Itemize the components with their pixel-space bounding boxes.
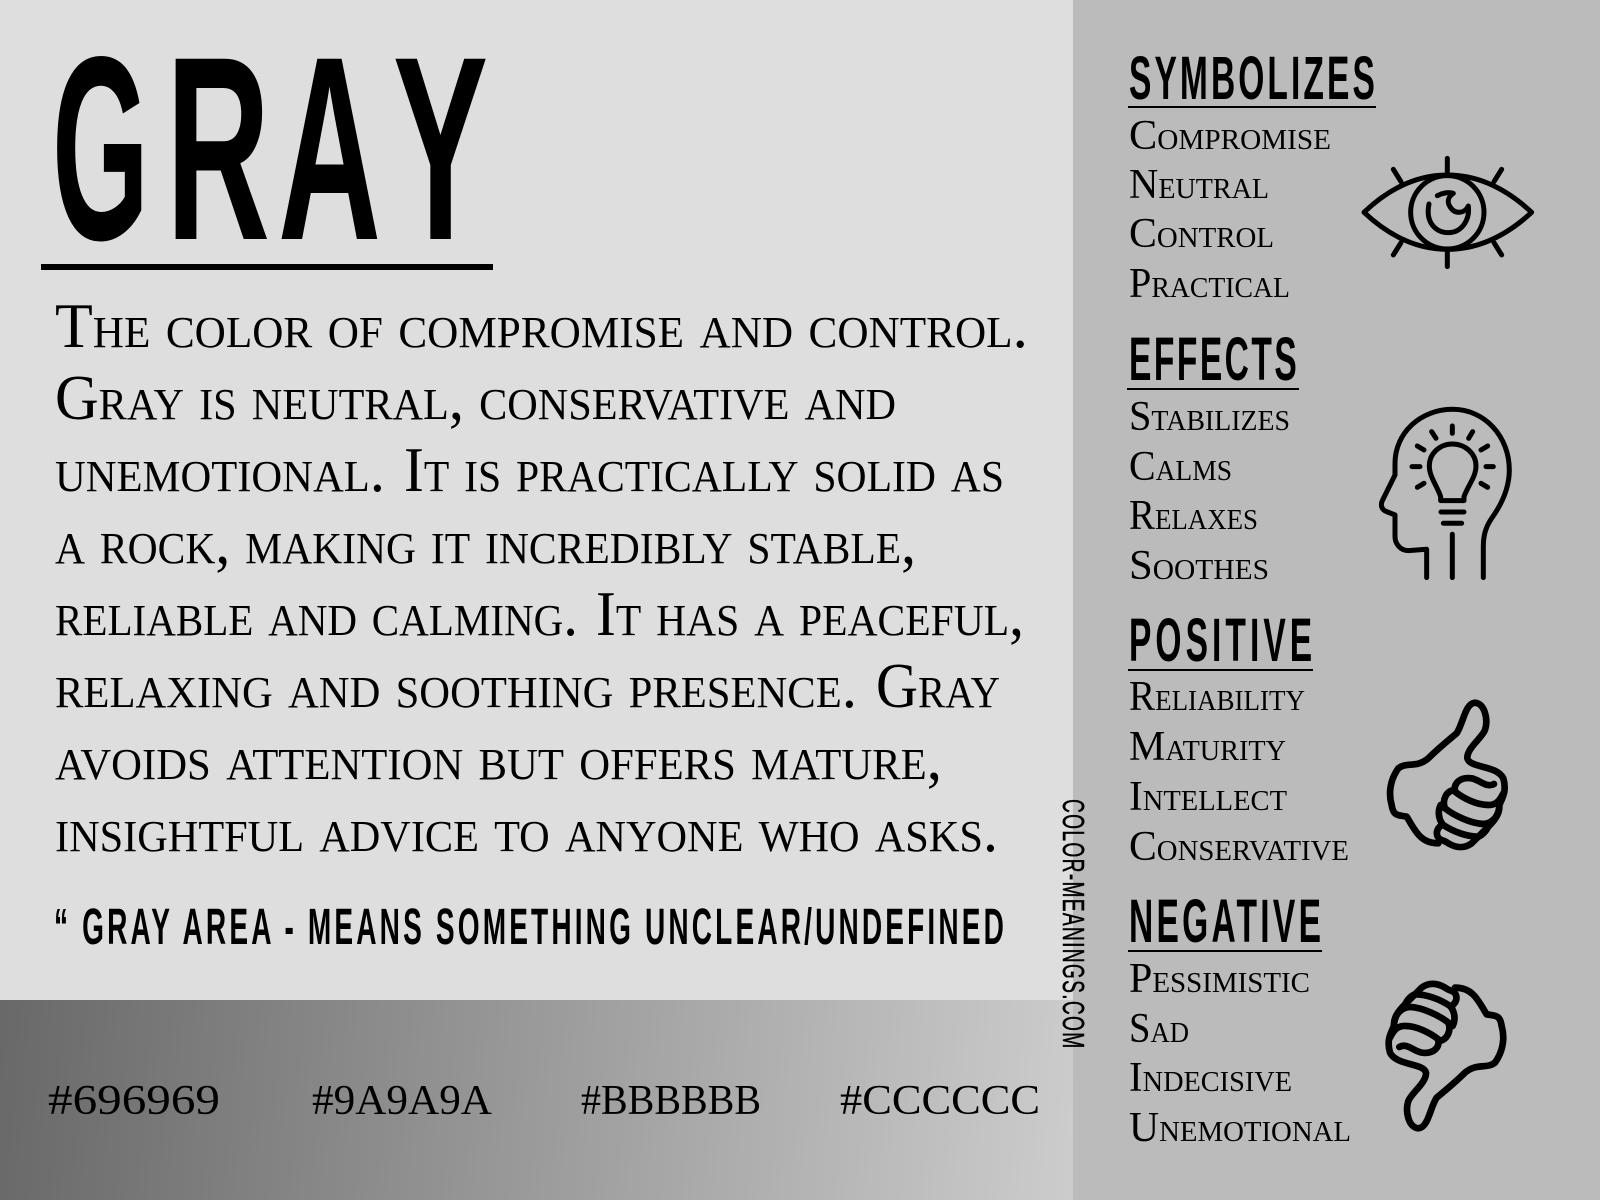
panel: colour swatch gradient	[0, 1000, 1073, 1200]
vertical site credit: COLOR-MEANINGS.COM	[1056, 799, 1089, 1048]
hex code 1: #696969	[48, 1078, 220, 1124]
icon: thumbs up	[1390, 703, 1505, 847]
panel: right sidebar	[1073, 0, 1600, 1200]
list: positive: Reliability	[1129, 674, 1305, 720]
panel: negative	[1128, 887, 1503, 1151]
list: negative: Indecisive	[1129, 1055, 1292, 1101]
list: negative	[1129, 956, 1351, 1151]
list: positive	[1129, 674, 1349, 870]
list: symbolizes	[1129, 113, 1331, 307]
list: effects: Calms	[1129, 444, 1232, 490]
icon: head with light bulb	[1381, 409, 1509, 578]
list: effects: Soothes	[1129, 543, 1269, 589]
text block: description: a rock, making it incredibly stable,	[55, 507, 916, 577]
quote: “ GRAY AREA - MEANS SOMETHING UNCLEAR/UNDEFINED	[54, 898, 1004, 955]
text block: description: relaxing and soothing presence.	[55, 651, 857, 721]
title: R	[166, 2, 270, 295]
list: effects: Relaxes	[1129, 493, 1258, 539]
text block: description: Gray is neutral, conservative and	[55, 363, 896, 433]
list: symbolizes: Control	[1129, 211, 1274, 257]
text block: description: reliable and calming.	[55, 579, 578, 649]
text block: description: Gray	[876, 651, 1000, 721]
list: negative: Pessimistic	[1129, 956, 1310, 1002]
panel: effects	[1127, 325, 1509, 589]
text block: description: The color of compromise and control.	[55, 291, 1028, 361]
heading: symbolizes: SYMBOLIZES	[1129, 44, 1375, 113]
icon: eye	[1364, 158, 1532, 267]
text block: description: unemotional.	[55, 435, 385, 505]
title: A	[278, 2, 381, 295]
panel: main background	[0, 0, 1073, 1000]
title underline	[41, 264, 493, 270]
title: Y	[393, 2, 488, 295]
heading: positive: POSITIVE	[1129, 606, 1312, 675]
panel: symbolizes	[1128, 44, 1532, 307]
list: symbolizes: Compromise	[1129, 113, 1331, 159]
text block: description	[55, 291, 1028, 865]
list: symbolizes: Neutral	[1129, 162, 1269, 208]
list: positive: Maturity	[1129, 724, 1286, 770]
heading: negative: NEGATIVE	[1129, 887, 1321, 956]
list: positive: Conservative	[1129, 824, 1349, 870]
list: effects: Stabilizes	[1129, 394, 1290, 440]
icon: thumbs down	[1389, 984, 1503, 1128]
title	[52, 2, 488, 295]
text block: description: It has a peaceful,	[596, 579, 1024, 649]
hex code 3: #BBBBBB	[581, 1078, 761, 1124]
heading: effects: EFFECTS	[1129, 325, 1297, 394]
panel: positive	[1128, 606, 1505, 870]
list: positive: Intellect	[1129, 774, 1287, 820]
hex code 4: #CCCCCC	[840, 1078, 1040, 1124]
list: negative: Unemotional	[1129, 1105, 1351, 1151]
list: effects	[1129, 394, 1290, 589]
hex code 2: #9A9A9A	[312, 1078, 493, 1124]
text block: description: avoids attention but offers mature,	[55, 723, 942, 793]
list: negative: Sad	[1129, 1006, 1189, 1052]
list: symbolizes: Practical	[1129, 261, 1290, 307]
title: G	[52, 2, 149, 295]
text block: description: It is practically solid as	[404, 435, 1004, 505]
text block: description: insightful advice to anyone who asks.	[55, 795, 998, 865]
